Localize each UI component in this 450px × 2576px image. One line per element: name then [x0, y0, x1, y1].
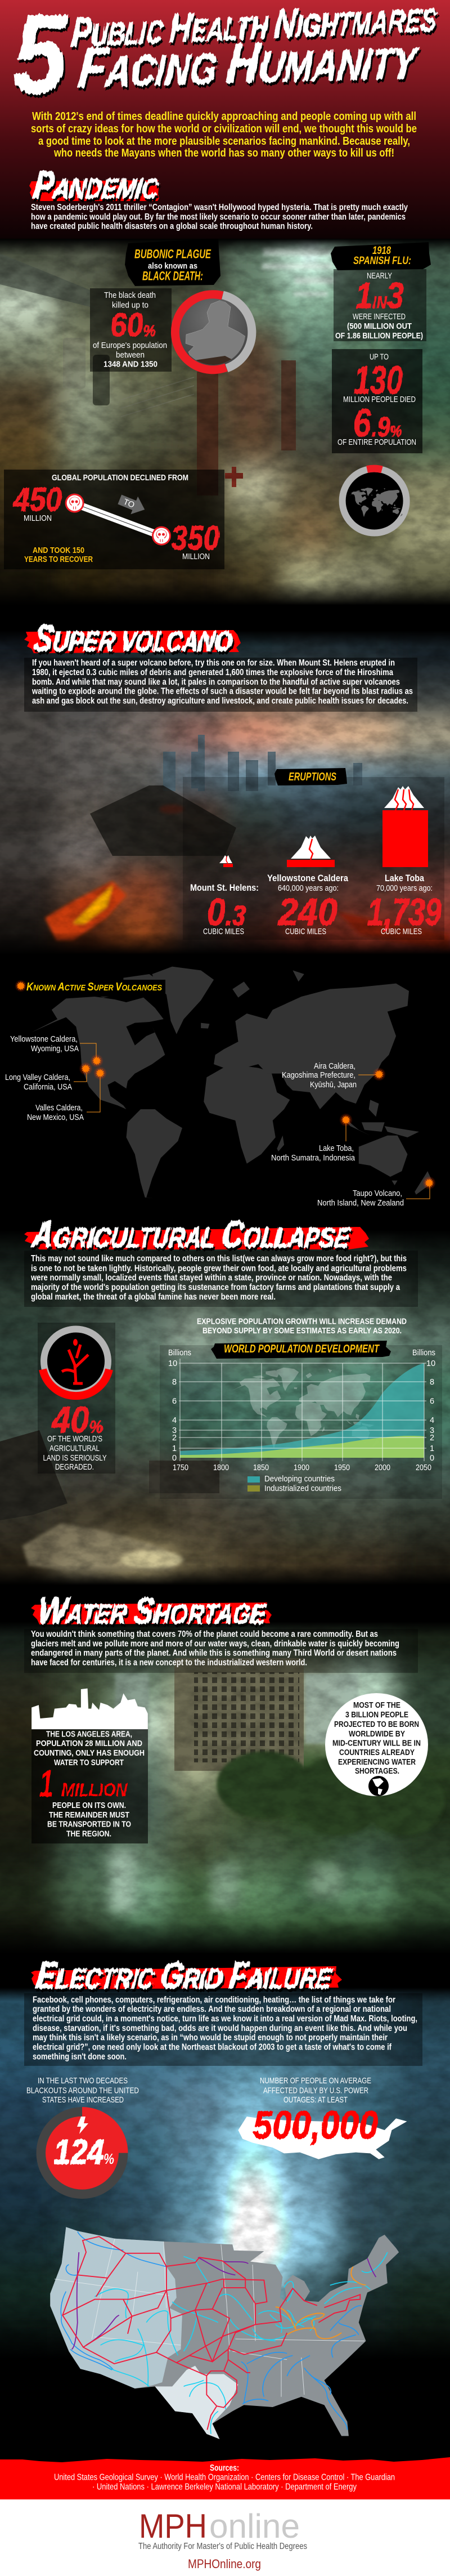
area: developing countries: [180, 1363, 424, 1458]
marker: Long Valley: Long Valley Caldera,: [5, 1073, 70, 1082]
callout: 3 billion people: EXPERIENCING WATER: [338, 1758, 416, 1767]
panel: spanish flu death statistic: OF ENTIRE POPULATION: [338, 438, 416, 447]
icon: globe: [368, 1776, 389, 1796]
panel: blackouts statistic: IN THE LAST TWO DECADES: [38, 2077, 128, 2086]
panel: black death statistic: of Europe's population: [93, 341, 167, 350]
panel: Los Angeles statistic: [32, 1689, 148, 1843]
texture: [0, 239, 450, 605]
heading: super volcano: [24, 618, 241, 659]
panel: black death statistic: between: [116, 351, 145, 360]
panel: spanish flu infection statistic: [334, 269, 426, 341]
marker: Yellowstone: [10, 1035, 104, 1068]
pandemic body text: have created public health disasters on a global scale throughout human history.: [31, 222, 313, 231]
chart y axis labels: 8: [172, 1378, 177, 1387]
logo: MPHonline: MPHOnline.org: [188, 2557, 261, 2571]
scene fades: [0, 239, 450, 256]
stat 124%: 124: [54, 2133, 104, 2172]
texture: [0, 1988, 450, 2359]
stat 6.9%: 6.9%: [353, 401, 402, 445]
panel: super volcano body text: [24, 658, 417, 712]
chart legend: [248, 1475, 341, 1493]
scene: subway photo backdrop: [0, 239, 450, 604]
map title: [15, 980, 165, 997]
panel: daily outages statistic: OUTAGES: AT LEAST: [284, 2096, 348, 2105]
area: industrialized countries: [180, 1436, 424, 1458]
heading brush stroke: [24, 1227, 369, 1249]
chart y axis labels: 4: [172, 1416, 177, 1425]
logo: MPHonline: online: [209, 2507, 300, 2545]
stat 1 in 3: 1IN3: [356, 275, 404, 316]
marker: Yellowstone: Wyoming, USA: [31, 1044, 79, 1053]
panel: global population decline: MILLION: [182, 552, 210, 561]
panel: daily outages statistic: NUMBER OF PEOPLE ON AVERAGE: [260, 2077, 371, 2086]
panel: bubonic plague label: [125, 239, 220, 286]
scene fade: [0, 1988, 450, 2002]
lava flow: [45, 805, 450, 952]
chart y axis labels: 2: [430, 1434, 434, 1443]
texture: [0, 1230, 450, 1585]
panel: global population decline: YEARS TO RECOVER: [24, 555, 93, 564]
map: 345 kV lines: [61, 2231, 362, 2430]
stat 350: 350: [172, 519, 219, 557]
map: state borders: [55, 2239, 364, 2397]
chart: 124% pie: [36, 2107, 128, 2199]
icon: lightning bolt: [77, 2117, 88, 2134]
stat 130: 130: [354, 358, 403, 402]
panel: spanish flu infection statistic: NEARLY: [367, 271, 392, 280]
heading brush stroke: [31, 1966, 342, 1989]
marker: Lake Toba: Lake Toba,: [319, 1144, 354, 1153]
marker: Valles: [27, 1066, 107, 1122]
panel: blackouts statistic: STATES HAVE INCREASED: [42, 2096, 124, 2105]
chart: US electric grid map: [50, 2227, 399, 2439]
map: proposed backbone lines: [62, 2236, 360, 2430]
panel: Los Angeles statistic: COUNTING, ONLY HAS ENOUGH: [34, 1749, 145, 1758]
scene: barren wasteland backdrop: [0, 1234, 450, 1584]
panel: degraded land statistic: OF THE WORLD'S: [47, 1435, 102, 1444]
panel: water shortage body text: have faced for centuries, it is a new concept to the industrialized western world.: [31, 1658, 307, 1668]
labels: Lake Toba: Lake Toba: [385, 873, 425, 883]
chart y axis labels: Billions: [412, 1349, 435, 1358]
scene fade: [0, 1622, 450, 1637]
marker: Aira: [282, 1062, 386, 1090]
intro text: [31, 110, 417, 159]
stat 450: 450: [13, 481, 62, 518]
panel: black death statistic: 1348 AND 1350: [104, 360, 158, 369]
chart y axis labels: 6: [172, 1397, 177, 1406]
chart x axis labels: [173, 1463, 431, 1472]
panel: black death statistic: [90, 288, 172, 372]
decline line: [79, 505, 159, 535]
stat 1 million: MILLION: [61, 1780, 128, 1800]
stat 500,000: 500,000: [253, 2103, 378, 2147]
chart x axis labels: 2000: [375, 1463, 390, 1472]
labels: Mount St. Helens: CUBIC MILES: [203, 927, 244, 936]
eruptions label: ERUPTIONS: [289, 771, 336, 783]
chart y axis labels: 1: [172, 1444, 177, 1453]
callout: 3 billion people: [325, 1693, 428, 1796]
panel: bubonic plague label: BUBONIC PLAGUE: [134, 247, 212, 261]
labels: Yellowstone Caldera: 240: [277, 891, 338, 934]
panel: spanish flu death statistic: UP TO: [370, 352, 389, 361]
panel: spanish flu label: [331, 242, 431, 270]
panel: blackouts statistic: %: [104, 2150, 114, 2167]
panel: Los Angeles statistic: THE REMAINDER MUST: [49, 1811, 129, 1820]
puddle reflection: [22, 1523, 186, 1571]
panel: spanish flu infection statistic: WERE INFECTED: [353, 312, 406, 322]
chart y axis labels: 2: [172, 1434, 177, 1443]
panel: electric grid body text: [24, 1993, 422, 2066]
chart legend: Developing countries: [264, 1475, 335, 1484]
panel: black death statistic: killed up to: [112, 301, 148, 310]
panel: degraded land statistic: LAND IS SERIOUSLY: [43, 1454, 107, 1463]
logo: MPHonline: The Authority For Master's of Public Health Degrees: [138, 2542, 307, 2551]
stat 40%: 40%: [51, 1399, 103, 1440]
scene fades: [0, 580, 450, 605]
scene fade: [0, 631, 450, 648]
bar: Mount St. Helens: [219, 855, 233, 867]
subway sign: [0, 266, 90, 307]
chart y axis labels: Billions: [168, 1349, 191, 1358]
map: United States base: [50, 2227, 399, 2439]
panel: water shortage body text: [24, 1629, 418, 1673]
bar: Lake Toba: [382, 786, 428, 867]
arrow: to: TO: [122, 498, 136, 510]
panel: degraded land statistic: AGRICULTURAL: [50, 1444, 100, 1453]
heading: water shortage: [31, 1590, 272, 1631]
tree canopy: [217, 1751, 444, 1836]
chart: 40% donut: [43, 1329, 109, 1396]
map: western interconnection: [50, 2227, 182, 2389]
panel: bubonic plague label: also known as: [148, 262, 197, 271]
marker: Long Valley: California, USA: [24, 1083, 72, 1092]
icon: skull start: [65, 493, 84, 512]
icon: dead tree: [62, 1345, 88, 1383]
chart legend: Industrialized countries: [264, 1484, 341, 1493]
labels: Lake Toba: 70,000 years ago:: [376, 884, 433, 893]
wrecked truck: [0, 1430, 68, 1520]
panel: spanish flu death statistic: MILLION PEOPLE DIED: [343, 395, 416, 404]
marker: Long Valley: [5, 1062, 92, 1092]
callout: explosive population growth: [197, 1316, 407, 1336]
callout: 3 billion people: MOST OF THE: [353, 1701, 400, 1710]
chart x axis labels: 1800: [213, 1463, 229, 1472]
icon: skull end: [152, 526, 171, 546]
scene: darkened Times Square backdrop: [0, 1965, 450, 2378]
chart x axis labels: 1900: [294, 1463, 309, 1472]
bar: Yellowstone Caldera: [287, 836, 335, 867]
subway ceiling lights: [262, 248, 334, 296]
panel: global population decline: [4, 470, 224, 569]
icon: city skyline: [32, 1689, 148, 1730]
sources band: · United Nations · Lawrence Berkeley National Laboratory · Department of Energy: [92, 2483, 357, 2492]
heading text: WATER SHORTAGE: [35, 1590, 269, 1631]
heading: electric grid failure: [31, 1955, 342, 1997]
scene fade: [0, 932, 450, 954]
panel: bubonic plague label: BLACK DEATH:: [142, 269, 203, 283]
scene fade: [0, 2325, 450, 2359]
panel: Los Angeles statistic: WATER TO SUPPORT: [54, 1758, 124, 1767]
panel: Los Angeles statistic: PEOPLE ON ITS OWN.: [52, 1801, 126, 1810]
panel: super volcano body text: 1980, it ejected 0.3 cubic miles of debris and generated 1,600 times the explosive force of the Hiroshima: [32, 668, 393, 677]
scene: flooded city backdrop: [0, 1599, 450, 1976]
chart x axis labels: 2050: [416, 1463, 431, 1472]
panel: spanish flu label: 1918: [372, 245, 391, 257]
labels: Mount St. Helens: Mount St. Helens:: [190, 883, 259, 893]
chart x axis labels: 1750: [173, 1463, 188, 1472]
chart x axis labels: 1850: [253, 1463, 269, 1472]
heading: agricultural collapse: [24, 1214, 369, 1256]
panel: spanish flu label: SPANISH FLU:: [353, 255, 411, 267]
map: 500 kV lines: [72, 2252, 376, 2349]
water reflections: [110, 1850, 343, 1912]
panel: water shortage body text: You wouldn't think something that covers 70% of the planet could become a rare commodity. But as: [31, 1629, 378, 1639]
band shape: [0, 2457, 450, 2499]
stat 60%: 60%: [110, 307, 156, 343]
panel: global population decline: AND TOOK 150: [33, 546, 84, 555]
panel: daily outages statistic: [238, 2077, 407, 2159]
marker: Lake Toba: [271, 1113, 356, 1163]
chart: Europe 60% donut: [175, 294, 252, 372]
scene: volcano and city backdrop: [0, 633, 450, 953]
marker: Taupo: Taupo Volcano,: [353, 1189, 402, 1198]
chart gridlines: [179, 1359, 426, 1461]
chart title label: [211, 1341, 391, 1359]
panel: daily outages statistic: AFFECTED DAILY BY U.S. POWER: [263, 2087, 368, 2096]
title: [13, 0, 438, 117]
chart y axis labels: 3: [430, 1426, 434, 1435]
chart title label: WORLD POPULATION DEVELOPMENT: [224, 1343, 380, 1355]
chart y axis labels: 1: [430, 1444, 434, 1453]
callout: 3 billion people: WORLDWIDE BY: [349, 1730, 405, 1739]
panel: spanish flu infection statistic: (500 MILLION OUT: [347, 322, 412, 331]
labels: Lake Toba: CUBIC MILES: [381, 927, 422, 936]
panel: spanish flu infection statistic: OF 1.86 BILLION PEOPLE): [335, 332, 423, 341]
heading brush stroke: [24, 630, 241, 653]
chart y axis labels: 10: [168, 1359, 177, 1368]
heading: pandemic: [29, 164, 161, 207]
panel: spanish flu death statistic: [332, 349, 422, 453]
panel: electric grid body text: may think this isn't a likely scenario, as in “who would be stupid enough to not properly maintain their: [33, 2033, 388, 2043]
panel: global population decline: MILLION: [24, 514, 52, 523]
scene fade: [0, 1920, 450, 1954]
title line 2: FACING HUMANITY: [76, 27, 422, 100]
sources band: Sources:: [210, 2463, 239, 2473]
map continents: [32, 967, 432, 1198]
marker: Valles: New Mexico, USA: [27, 1113, 84, 1122]
marker: Yellowstone: Yellowstone Caldera,: [10, 1035, 78, 1044]
panel: Los Angeles statistic: THE LOS ANGELES AREA,: [46, 1730, 132, 1739]
eruptions label: [274, 768, 347, 785]
train door windows: [63, 338, 86, 389]
stat 1 million: [39, 1762, 128, 1805]
panel: blackouts statistic: [26, 2077, 139, 2199]
labels: Mount St. Helens: 0.3: [207, 891, 246, 934]
chart y axis labels: 0: [172, 1454, 177, 1463]
map: 230 kV lines: [94, 2252, 388, 2434]
logo: MPHonline: MPH: [139, 2507, 207, 2545]
chart y axis labels: 6: [430, 1397, 434, 1406]
chart x axis labels: 1950: [334, 1463, 350, 1472]
panel: electric grid body text: electrical grid?”, one need only look at the Northeast blackout of 2003 to get a taste of what's to come if: [33, 2043, 392, 2052]
labels: Yellowstone Caldera: 640,000 years ago:: [278, 884, 339, 893]
chart: world map of known active super volcanoes: [5, 967, 436, 1208]
building windows: [194, 1672, 299, 1762]
panel: blackouts statistic: BLACKOUTS AROUND THE UNITED: [26, 2087, 139, 2096]
heading brush stroke: [31, 1602, 272, 1624]
city towers: [163, 735, 362, 791]
panel: agricultural collapse body text: were normally small, localized events that stayed within a state, province or nation. Nowadays, with the: [30, 1273, 392, 1283]
texture: [0, 1622, 450, 1954]
header background gradient: [0, 0, 450, 259]
sources band: [0, 2457, 450, 2499]
texture: [0, 631, 450, 954]
heading brush stroke: [29, 180, 159, 201]
callout: 3 billion people: PROJECTED TO BE BORN: [334, 1720, 419, 1729]
callout: explosive population growth: BEYOND SUPPLY BY SOME ESTIMATES AS EARLY AS 2020.: [202, 1326, 402, 1336]
marker: Taupo: [317, 1176, 436, 1208]
panel backing: [183, 777, 444, 940]
marker: Aira: Kyūshū, Japan: [310, 1081, 357, 1090]
marker: Aira: Aira Caldera,: [314, 1062, 356, 1071]
logo: MPHonline: [138, 2507, 307, 2571]
scene fade: [0, 1565, 450, 1585]
footer: white background: [0, 2499, 450, 2576]
callout: explosive population growth: EXPLOSIVE POPULATION GROWTH WILL INCREASE DEMAND: [197, 1316, 407, 1326]
panel: eruptions comparison: [183, 768, 444, 940]
panel: Los Angeles statistic: POPULATION 28 MILLION AND: [36, 1739, 142, 1748]
labels: Mount St. Helens: [190, 883, 259, 936]
panel backing: [32, 1729, 148, 1843]
panel: global population decline: GLOBAL POPULATION DECLINED FROM: [52, 473, 188, 483]
panel: degraded land statistic: [38, 1323, 115, 1474]
panel: electric grid body text: granted by the wonders of electricity are endless. And the sudden breakdown of a regional or national: [33, 2004, 391, 2014]
scene fade: [0, 1230, 450, 1250]
panel: electric grid body text: something isn't done soon.: [33, 2052, 127, 2061]
center tower: [174, 1658, 304, 1771]
stat 1 million: 1: [39, 1762, 53, 1805]
callout: 3 billion people: MID-CENTURY WILL BE IN: [332, 1739, 421, 1748]
panel: agricultural collapse body text: global market, the threat of a global famine has never been more real.: [31, 1292, 276, 1302]
heading text: PANDEMIC: [31, 164, 161, 207]
map: Texas interconnection: [155, 2366, 238, 2439]
heading text: ELECTRIC GRID FAILURE: [34, 1955, 335, 1997]
chart y axis labels: 10: [426, 1359, 435, 1368]
chart y axis labels: 4: [430, 1416, 434, 1425]
heading text: AGRICULTURAL COLLAPSE: [29, 1214, 353, 1256]
marker: Valles: Valles Caldera,: [35, 1104, 83, 1113]
heading text: SUPER VOLCANO: [32, 618, 235, 659]
map title: KNOWN ACTIVE SUPER VOLCANOES: [26, 981, 162, 993]
medical cross on coat: [225, 467, 243, 487]
train body stripes: [121, 377, 194, 417]
chart y axis labels: 3: [172, 1426, 177, 1435]
panel: agricultural collapse body text: [24, 1251, 418, 1307]
pandemic body text: [31, 203, 408, 231]
labels: Yellowstone Caldera: CUBIC MILES: [285, 927, 326, 936]
arrow: to: [116, 490, 148, 519]
callout: 3 billion people: COUNTRIES ALREADY: [339, 1748, 415, 1757]
platform column: [197, 372, 218, 495]
panel: degraded land statistic: DEGRADED.: [55, 1463, 94, 1472]
chart background map: [232, 1368, 379, 1448]
volcano cone: [90, 785, 236, 856]
marker: Taupo: North Island, New Zealand: [317, 1199, 404, 1208]
labels: Yellowstone Caldera: [267, 873, 349, 936]
callout: 3 billion people: 3 BILLION PEOPLE: [345, 1711, 408, 1720]
sky gaps between buildings: [115, 1673, 358, 1744]
labels: Yellowstone Caldera: Yellowstone Caldera: [267, 873, 349, 883]
map: 765 kV lines: [276, 2267, 366, 2339]
chart backing: [160, 1345, 442, 1499]
chart y axis labels: 8: [430, 1378, 434, 1387]
callout: 3 billion people: SHORTAGES.: [355, 1767, 399, 1776]
chart y axis labels: [168, 1349, 435, 1463]
marker: Aira: Kagoshima Prefecture,: [282, 1071, 356, 1080]
marker: Lake Toba: North Sumatra, Indonesia: [271, 1154, 356, 1163]
chart: world 6.9% donut: [343, 468, 407, 533]
panel: Los Angeles statistic: THE REGION.: [66, 1830, 111, 1839]
panel: black death statistic: The black death: [104, 291, 156, 300]
chart: world population development: [160, 1341, 442, 1499]
chart y axis labels: 0: [430, 1454, 434, 1463]
labels: Lake Toba: [367, 873, 442, 936]
icon: US silhouette: [238, 2117, 407, 2159]
abandoned hut: [149, 1461, 219, 1493]
panel: Los Angeles statistic: BE TRANSPORTED IN TO: [47, 1820, 131, 1829]
icon: tree leaf: [73, 1339, 78, 1346]
